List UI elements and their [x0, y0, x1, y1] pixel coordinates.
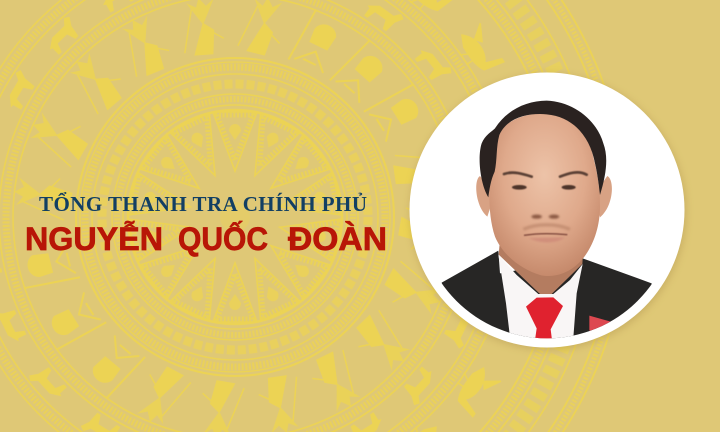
heading: person name: ĐOÀN: [288, 221, 387, 257]
brows, eyes, nose and mouth: [504, 172, 587, 242]
necktie: [526, 297, 563, 340]
portrait circle: [410, 72, 686, 360]
portrait soft shadow: [410, 74, 686, 350]
heading: job title: TỔNG THANH TRA CHÍNH PHỦ: [39, 192, 367, 216]
ears: [476, 176, 612, 217]
heading: person name: NGUYỄN: [25, 221, 163, 257]
shirt: [498, 254, 583, 338]
body clipped to the inner circle: [442, 245, 652, 338]
neck: [498, 245, 583, 294]
portrait figure: [442, 100, 652, 338]
heading: person name: QUỐC: [178, 221, 268, 257]
hair: [480, 101, 606, 197]
suit jacket: [442, 250, 652, 338]
heading: person name: [25, 221, 387, 257]
portrait white disc: [410, 72, 684, 348]
lapel pin: [589, 316, 611, 331]
face: [489, 113, 600, 276]
